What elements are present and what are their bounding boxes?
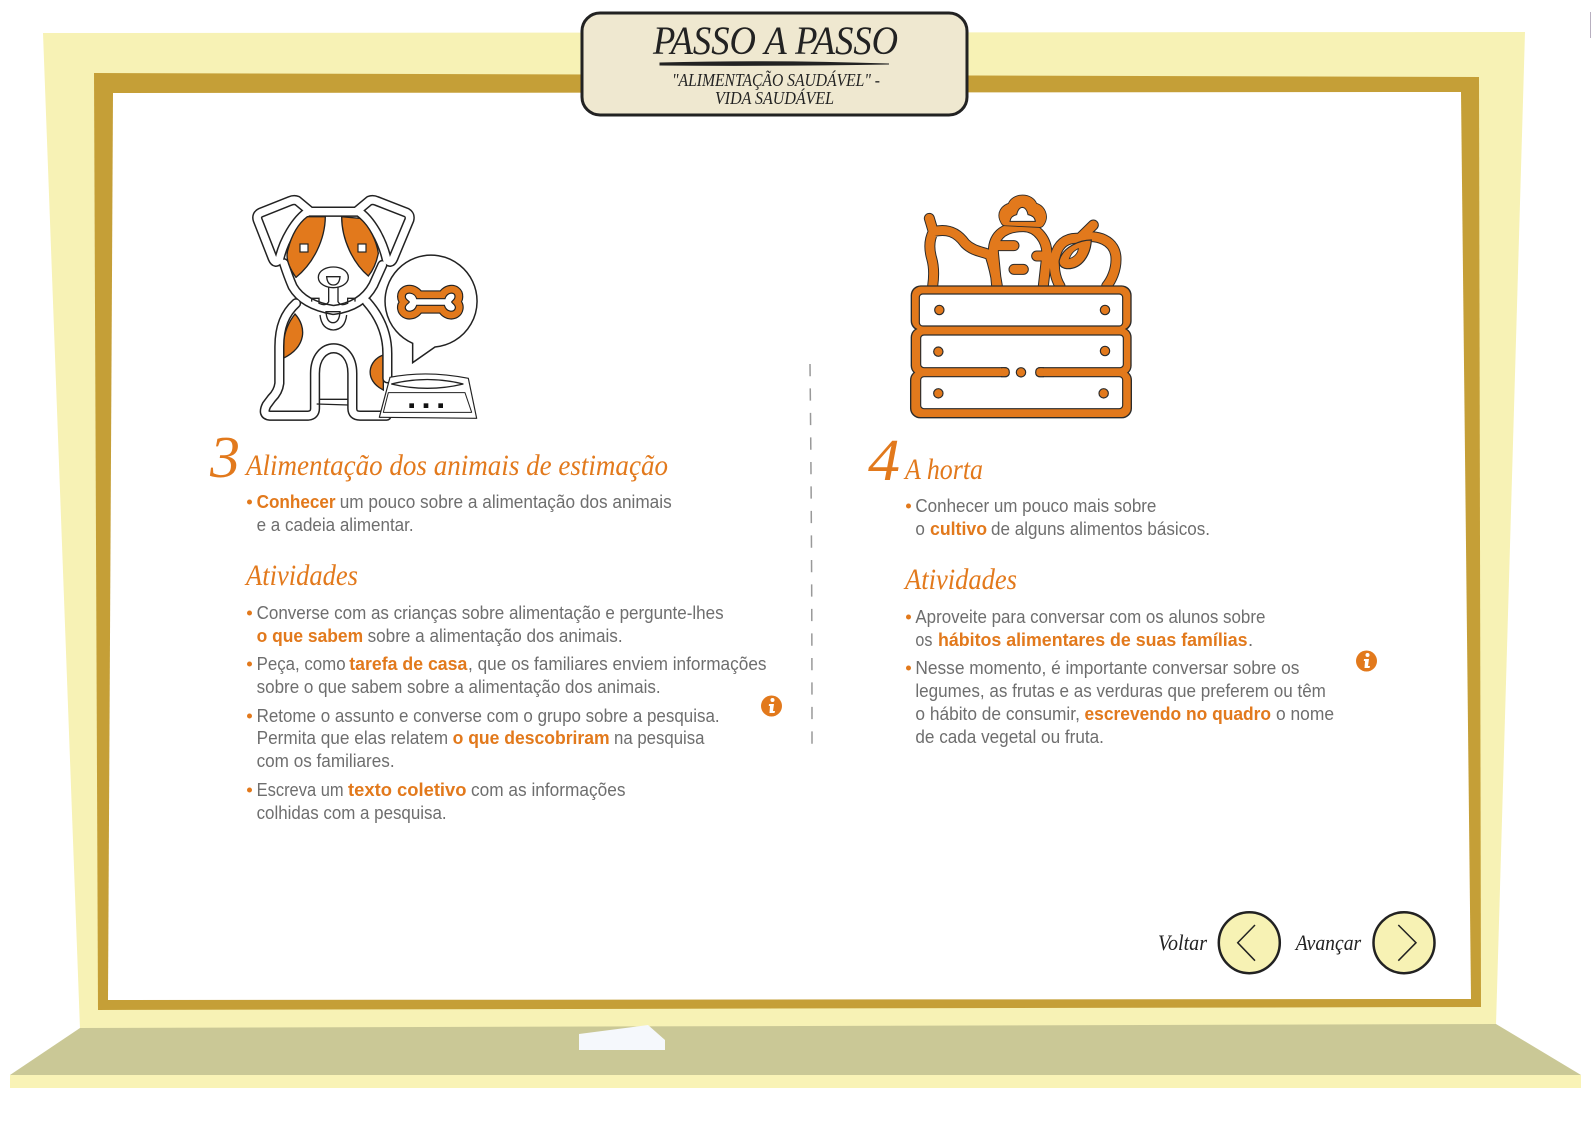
activity bullet 1: os — [915, 629, 932, 650]
subtitle: VIDA SAUDÁVEL — [715, 87, 834, 108]
step 3 heading: Alimentação dos animais de estimação — [244, 449, 668, 482]
activity bullet 1: Aproveite para conversar com os alunos sobre — [915, 606, 1265, 627]
activity bullet 2 — [247, 653, 766, 697]
activity bullet 2: de cada vegetal ou fruta. — [915, 726, 1104, 747]
chalk piece — [579, 1025, 665, 1050]
activity bullet 3 — [247, 705, 720, 771]
step 4 objective: o — [915, 518, 925, 539]
activity bullet 3: o que descobriram — [453, 727, 610, 748]
activity bullet 4: texto coletivo — [348, 779, 466, 800]
activity bullet 1: hábitos alimentares de suas famílias — [938, 629, 1248, 650]
header plaque — [582, 13, 967, 115]
forward label: Avançar — [1294, 930, 1362, 955]
activity bullet 1: Converse com as crianças sobre alimentação e pergunte-lhes — [257, 602, 724, 623]
back label: Voltar — [1158, 930, 1207, 955]
activity bullet 1: . — [1248, 629, 1253, 650]
panel: step 4 — [868, 199, 1377, 747]
activity bullet 1 — [906, 606, 1265, 650]
activity bullet 1 — [247, 602, 724, 646]
step 3 objective: e a cadeia alimentar. — [257, 514, 414, 535]
activities heading: Atividades — [244, 559, 358, 592]
activity bullet 3: com os familiares. — [257, 750, 395, 771]
activity bullet 2: sobre o que sabem sobre a alimentação dos animais. — [257, 676, 661, 697]
back button — [1219, 912, 1280, 973]
icon: info — [761, 696, 782, 716]
activity bullet 2: legumes, as frutas e as verduras que preferem ou têm — [915, 680, 1326, 701]
forward button — [1374, 912, 1434, 973]
activity bullet 1: sobre a alimentação dos animais. — [368, 625, 623, 646]
activity bullet 4: Escreva um — [257, 779, 344, 800]
activity bullet 2: Peça, como — [257, 653, 346, 674]
activity bullet 3: Permita que elas relatem — [257, 727, 448, 748]
activity bullet 1: o que sabem — [257, 625, 363, 646]
step 3 objective — [247, 491, 672, 535]
activity bullet 2: escrevendo no quadro — [1084, 703, 1271, 724]
step 4 heading: A horta — [903, 453, 983, 486]
step 3 objective: um pouco sobre a alimentação dos animais — [340, 491, 672, 512]
title: PASSO A PASSO — [652, 18, 898, 63]
step 4 objective: cultivo — [930, 518, 987, 539]
activity bullet 2: tarefa de casa — [349, 653, 468, 674]
activity bullet 4: com as informações — [471, 779, 626, 800]
activity bullet 2: , que os familiares enviem informações — [468, 653, 766, 674]
step 4 objective: de alguns alimentos básicos. — [991, 518, 1210, 539]
subtitle — [672, 69, 880, 108]
icon: info — [1356, 650, 1377, 672]
activity bullet 2: o hábito de consumir, — [915, 703, 1080, 724]
activity bullet 4 — [247, 779, 626, 823]
activity bullet 2: o nome — [1276, 703, 1334, 724]
activity bullet 2: Nesse momento, é importante conversar sobre os — [915, 657, 1299, 678]
icon: crate of vegetables — [910, 199, 1132, 418]
chalk tray — [10, 1024, 1581, 1088]
step 3 objective: Conhecer — [257, 491, 336, 512]
subtitle: "ALIMENTAÇÃO SAUDÁVEL" - — [672, 69, 880, 90]
activities heading: Atividades — [903, 563, 1017, 596]
panel: step 3 — [209, 200, 782, 823]
activity bullet 2 — [906, 657, 1334, 747]
icon: dog with bone and bowl — [257, 200, 477, 418]
step 4 objective: Conhecer um pouco mais sobre — [915, 495, 1156, 516]
activity bullet 3: na pesquisa — [614, 727, 705, 748]
step number 3: 3 — [209, 424, 240, 490]
dashed divider — [810, 364, 812, 745]
activity bullet 4: colhidas com a pesquisa. — [257, 802, 447, 823]
step 4 objective — [906, 495, 1210, 539]
activity bullet 3: Retome o assunto e converse com o grupo sobre a pesquisa. — [257, 705, 720, 726]
step number 4: 4 — [868, 427, 900, 493]
